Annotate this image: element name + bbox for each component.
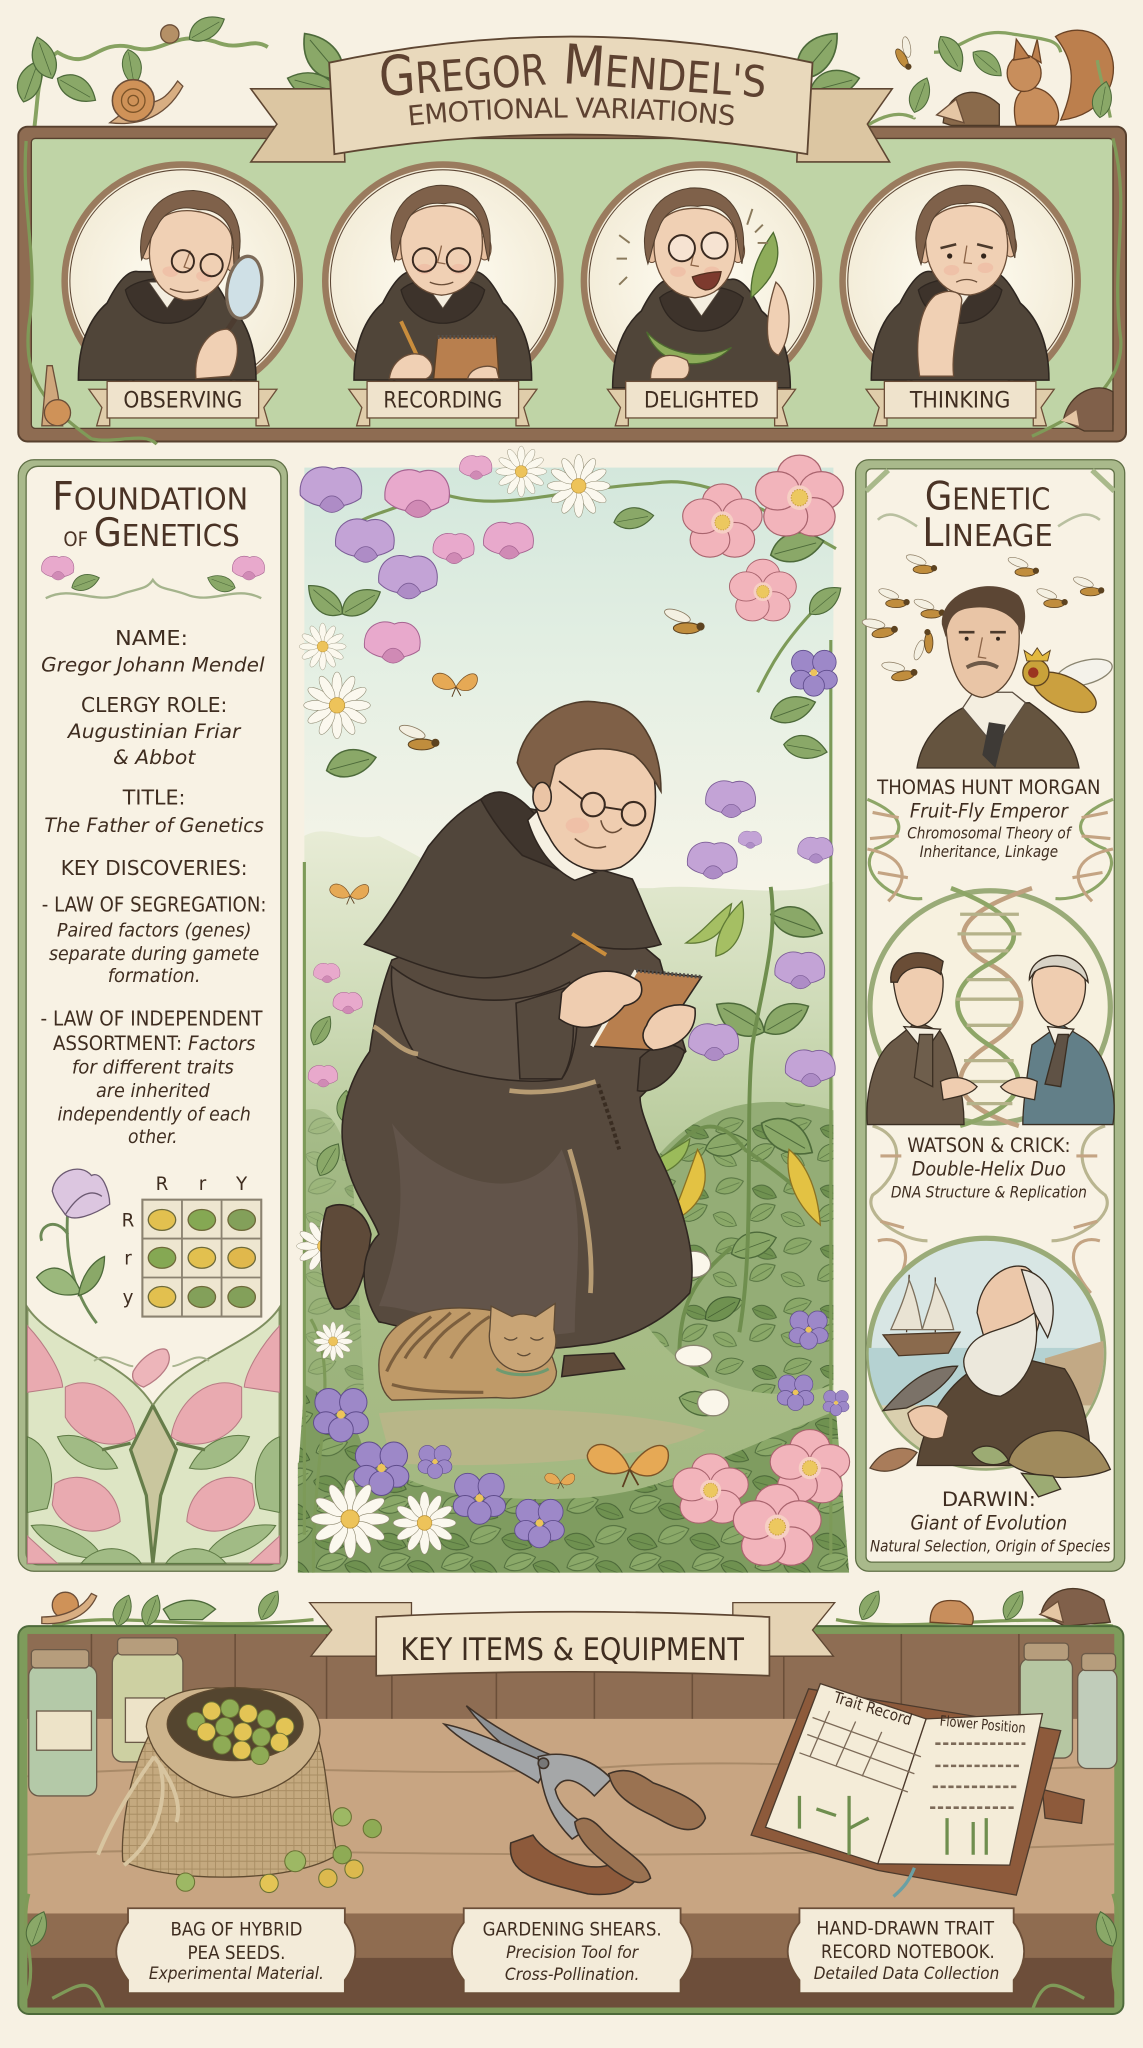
heading: genetic lineage xyxy=(878,474,1100,556)
bird and hand xyxy=(883,1366,958,1439)
label: RECORDING: RECORDING xyxy=(383,388,502,414)
garden ground xyxy=(304,831,833,1573)
garden flowers xyxy=(297,446,850,1565)
decoration: critters above equipment panel xyxy=(42,1586,1113,1629)
chart: punnett square: R xyxy=(122,1210,135,1231)
plaque: gardening shears xyxy=(452,1908,692,1993)
text: Morgan: Inheritance, Linkage xyxy=(920,842,1058,861)
vine on panel edges xyxy=(22,1894,1121,2011)
heading: foundation of genetics xyxy=(52,474,248,556)
table top xyxy=(27,1719,1114,1915)
text: biography: KEY DISCOVERIES: xyxy=(61,856,248,880)
panel: key items and equipment xyxy=(18,1603,1123,2014)
jars xyxy=(29,1638,1117,1796)
text: biography: separate during gamete xyxy=(49,943,259,965)
plaque: gardening shears: GARDENING SHEARS. xyxy=(483,1920,662,1941)
DNA helix xyxy=(951,888,1032,1126)
text: biography: Paired factors (genes) xyxy=(57,919,251,941)
text: Watson and Crick xyxy=(891,1134,1087,1202)
table front xyxy=(27,1913,1114,1959)
label: THINKING: THINKING xyxy=(909,388,1010,414)
text: biography: Gregor Johann Mendel xyxy=(41,653,265,676)
text: Watson and Crick: Double-Helix Duo xyxy=(912,1158,1066,1181)
icon: trait record notebook xyxy=(751,1684,1084,1896)
chart: punnett square: y xyxy=(123,1288,134,1309)
label: RECORDING xyxy=(349,381,537,426)
text: biography: are inherited xyxy=(96,1080,211,1102)
icon: snail top xyxy=(110,80,183,124)
boot xyxy=(321,1205,371,1309)
icon: sweet pea flower xyxy=(37,1169,110,1323)
plaque: bag of hybrid pea seeds: Experimental Material. xyxy=(149,1964,324,1984)
Watson xyxy=(867,953,977,1125)
border vines xyxy=(304,482,836,1573)
chart: punnett square: r xyxy=(124,1248,132,1269)
title banner xyxy=(249,32,894,163)
sleeping cat xyxy=(379,1304,556,1400)
notebook writing: Flower Position xyxy=(939,1714,1026,1737)
text: biography: formation. xyxy=(108,965,201,987)
text: Watson and Crick: WATSON & CRICK: xyxy=(907,1134,1071,1157)
text: Morgan: THOMAS HUNT MORGAN xyxy=(876,776,1101,799)
title text xyxy=(377,32,769,126)
plaque: trait record notebook xyxy=(788,1908,1024,1993)
oval: delighted xyxy=(584,165,819,397)
text: biography: - LAW OF SEGREGATION: xyxy=(42,893,266,917)
text: Morgan: Fruit-Fly Emperor xyxy=(910,800,1070,823)
text: biography: Augustinian Friar xyxy=(66,720,242,743)
swarm of flies xyxy=(860,553,1104,684)
label: OBSERVING xyxy=(89,381,277,426)
icon: bee xyxy=(889,34,923,72)
oval: observing xyxy=(65,165,300,397)
notebook xyxy=(592,970,701,1050)
chart: punnett square xyxy=(122,1174,261,1317)
text: biography: ASSORTMENT: Factors xyxy=(53,1032,255,1055)
pea plant xyxy=(626,781,835,1416)
notebook writing xyxy=(799,1687,1026,1855)
monk figure xyxy=(321,701,701,1377)
plaque: trait record notebook: HAND-DRAWN TRAIT xyxy=(816,1918,995,1939)
text: biography xyxy=(40,626,266,1148)
title text: EMOTIONAL VARIATIONS xyxy=(409,98,734,126)
label: DELIGHTED: DELIGHTED xyxy=(644,388,759,414)
plaque: bag of hybrid pea seeds: BAG OF HYBRID xyxy=(170,1920,302,1941)
text: Darwin: Giant of Evolution xyxy=(910,1511,1067,1534)
oval: thinking xyxy=(843,165,1078,397)
icon: snail in panel xyxy=(42,366,71,426)
icon: hedgehog in panel xyxy=(1061,388,1113,431)
Darwin figure xyxy=(917,1266,1090,1465)
Crick xyxy=(1001,955,1114,1125)
hands xyxy=(559,971,642,1027)
icon: sack of peas xyxy=(98,1688,381,1893)
panel: genetic lineage xyxy=(856,460,1125,1571)
banner: key items and equipment xyxy=(310,1603,835,1676)
ship xyxy=(883,1275,960,1356)
icon: gardening shears xyxy=(444,1706,705,1895)
notebook writing: Trait Record xyxy=(831,1687,914,1729)
label: THINKING xyxy=(866,381,1054,426)
panel decoration: sweet pea arch xyxy=(27,1307,280,1563)
text: biography: - LAW OF INDEPENDENT xyxy=(40,1006,263,1030)
portrait: Darwin xyxy=(862,1238,1110,1497)
plaque: bag of hybrid pea seeds: PEA SEEDS. xyxy=(187,1943,285,1964)
heading: foundation of genetics: OF GENETICS xyxy=(63,511,240,556)
text: biography: other. xyxy=(128,1126,178,1148)
chart: punnett square: r xyxy=(199,1174,207,1195)
fly with crown xyxy=(1023,648,1115,721)
portrait: Watson and Crick xyxy=(867,888,1114,1126)
text: Watson and Crick: DNA Structure & Replication xyxy=(891,1183,1087,1202)
heading: genetic lineage: GENETIC xyxy=(925,474,1050,519)
plaque: gardening shears: Precision Tool for xyxy=(506,1943,639,1963)
text: biography: The Father of Genetics xyxy=(44,814,264,837)
plaque: gardening shears: Cross-Pollination. xyxy=(505,1965,639,1985)
banner: key items and equipment: KEY ITEMS & EQUIPMENT xyxy=(400,1632,745,1668)
icon: hedgehog top xyxy=(937,92,999,125)
panel: emotional variations xyxy=(18,127,1126,444)
text: Morgan xyxy=(876,776,1101,861)
text: biography: independently of each xyxy=(57,1104,251,1126)
text: Darwin xyxy=(870,1488,1111,1556)
tortoise xyxy=(972,1431,1110,1497)
text: Darwin: DARWIN: xyxy=(942,1488,1036,1511)
panel: foundation of genetics xyxy=(18,460,287,1571)
text: biography: CLERGY ROLE: xyxy=(81,693,227,717)
text: biography: for different traits xyxy=(72,1057,234,1079)
vine decoration: top right xyxy=(867,31,1114,125)
title text: MENDEL'S xyxy=(561,32,769,110)
text: Morgan: Chromosomal Theory of xyxy=(907,824,1072,843)
chart: punnett square: R xyxy=(156,1174,169,1195)
plaque: bag of hybrid pea seeds xyxy=(116,1908,355,1993)
text: biography: & Abbot xyxy=(113,746,197,769)
text: biography: NAME: xyxy=(115,626,188,650)
plaque: trait record notebook: Detailed Data Collection xyxy=(814,1964,999,1984)
text: biography: TITLE: xyxy=(122,786,185,810)
heading: foundation of genetics: FOUNDATION xyxy=(52,474,248,519)
icon: squirrel xyxy=(1007,30,1113,125)
vine decoration: top left xyxy=(12,9,268,131)
ornament: floral divider xyxy=(42,556,265,598)
head xyxy=(517,701,661,871)
chart: punnett square: Y xyxy=(235,1174,248,1195)
oval: recording xyxy=(325,165,560,397)
portrait: Thomas Hunt Morgan xyxy=(917,586,1115,768)
panel: garden illustration xyxy=(297,446,850,1573)
title text: GREGOR xyxy=(377,33,548,109)
label: DELIGHTED xyxy=(607,381,796,426)
rope belt xyxy=(374,1027,596,1293)
decoration: side DNA strands xyxy=(867,799,1113,1293)
insects xyxy=(330,606,705,1489)
foliage xyxy=(305,900,828,1422)
wood wall xyxy=(27,1634,1114,1720)
plaque: trait record notebook: RECORD NOTEBOOK. xyxy=(821,1942,995,1963)
heading: genetic lineage: LINEAGE xyxy=(922,511,1053,556)
label: OBSERVING: OBSERVING xyxy=(123,388,242,414)
